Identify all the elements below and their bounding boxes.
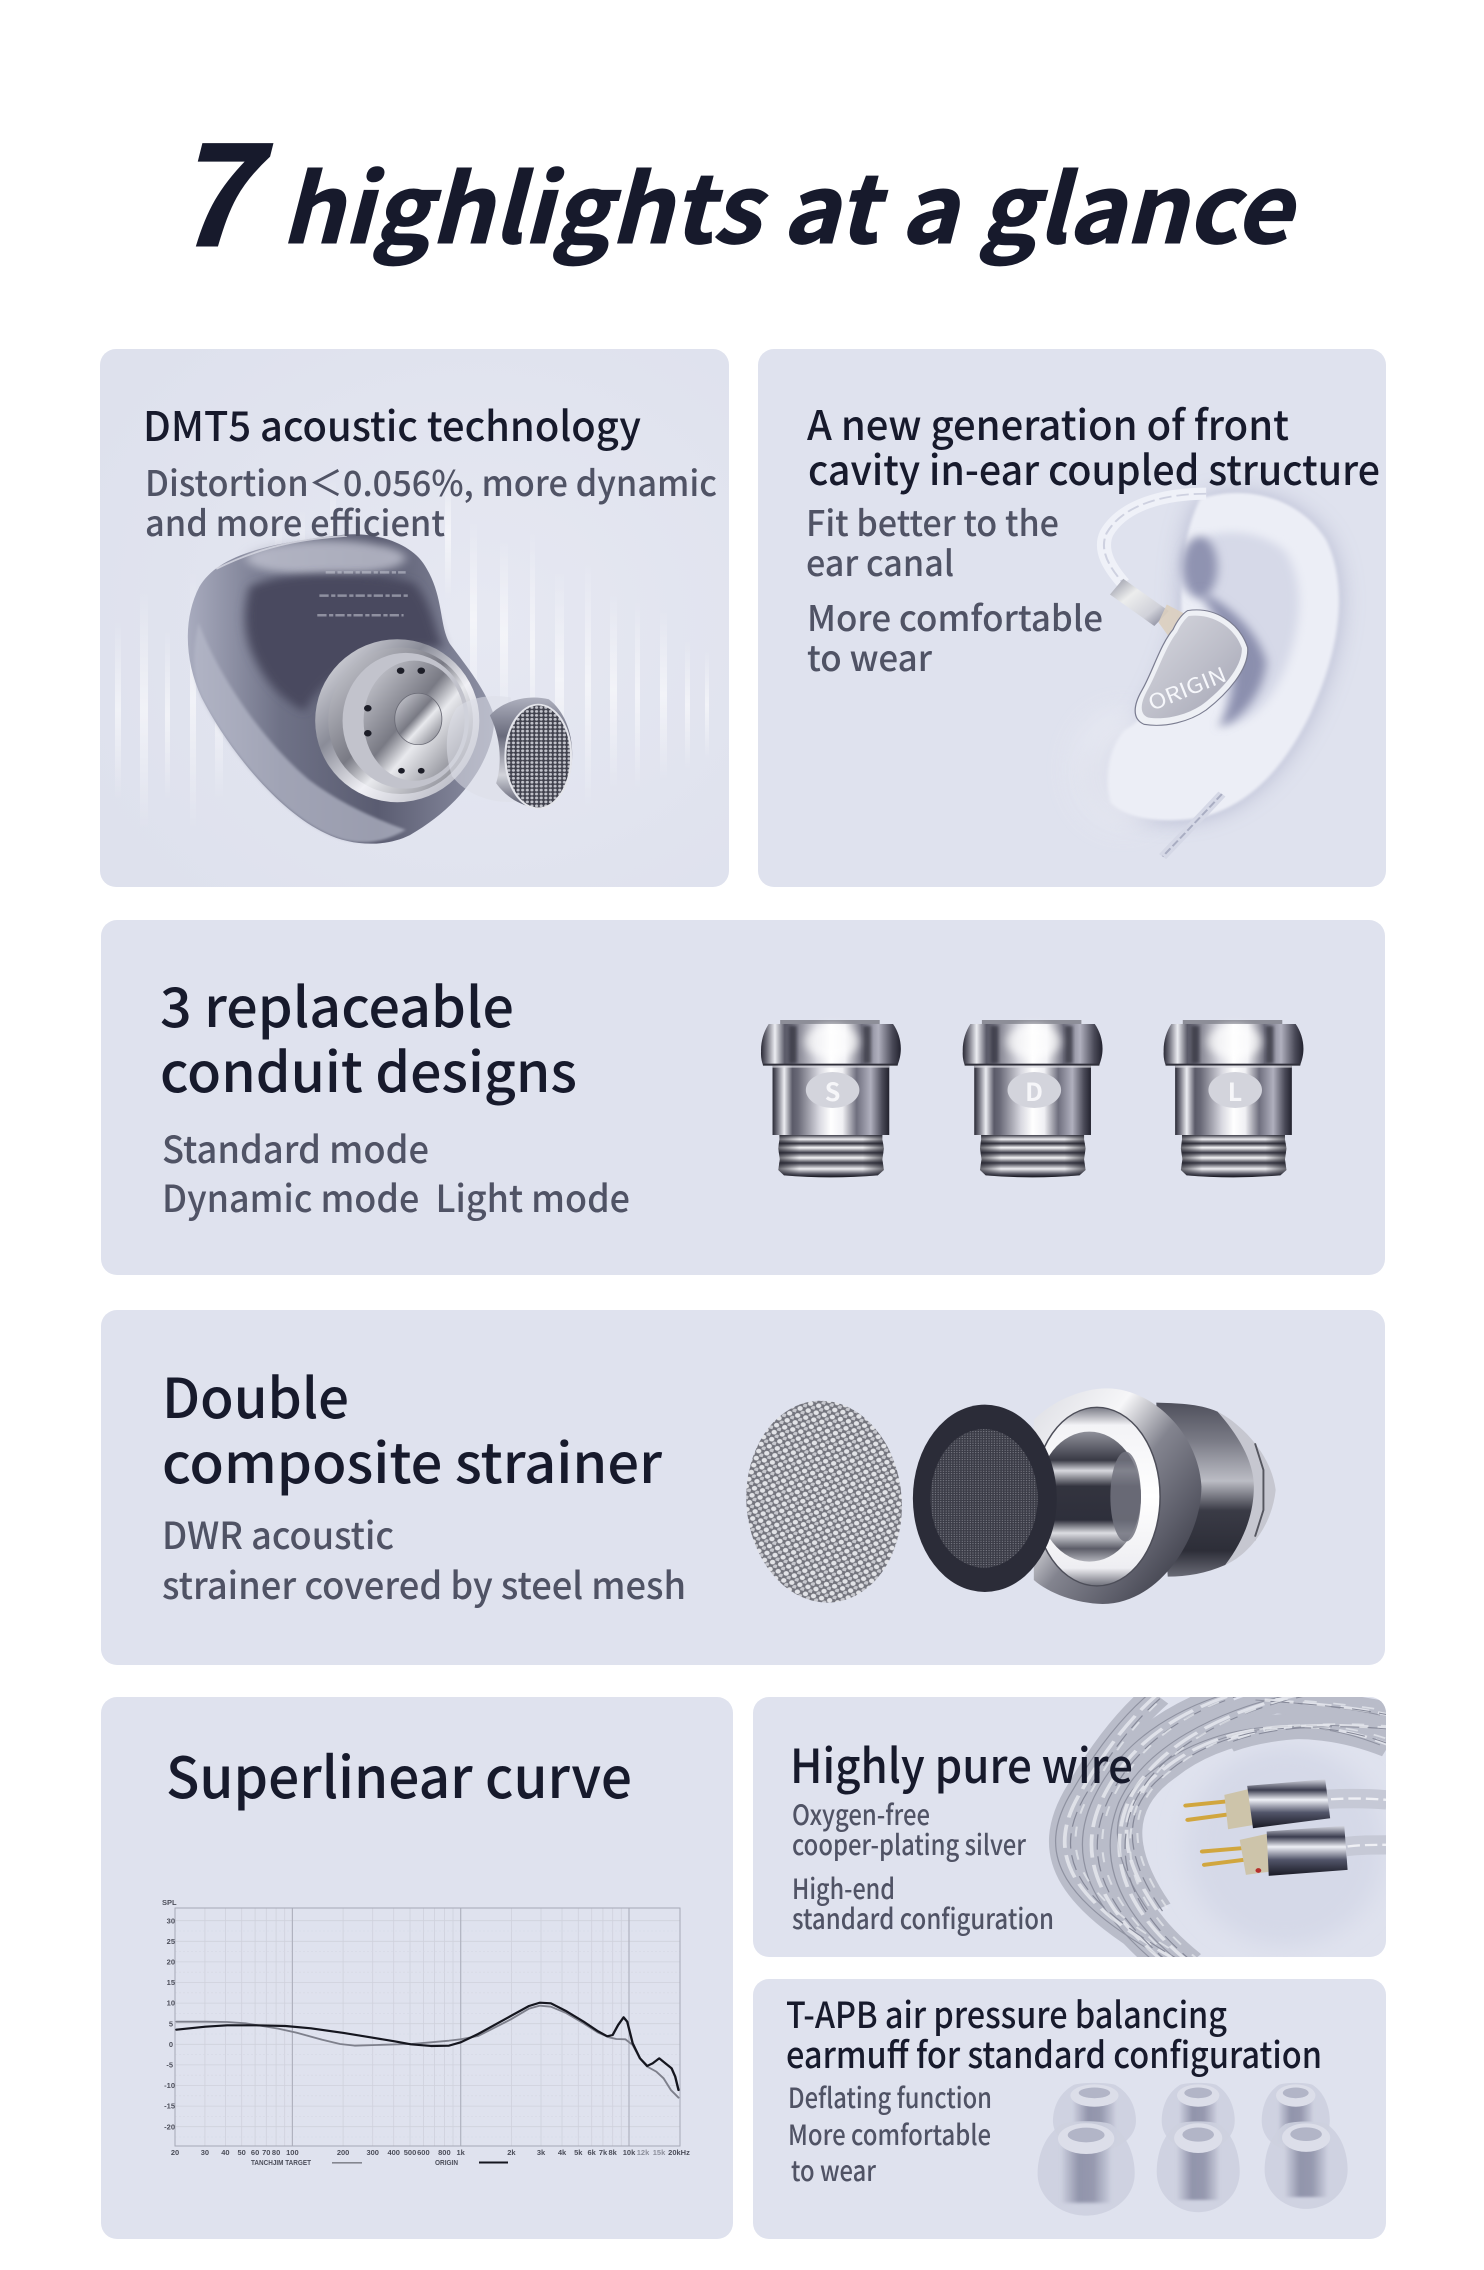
text block: Oxygen-free [792, 1794, 930, 1834]
heading [160, 963, 577, 1108]
line chart: frequency response: 5 [169, 2019, 173, 2028]
line chart: frequency response: 10k [623, 2148, 636, 2157]
text block [162, 1120, 630, 1223]
text block [792, 1794, 1054, 1938]
line chart: frequency response [162, 1898, 690, 2167]
heading: cavity in-ear coupled structure [808, 437, 1380, 497]
panel: double composite strainer [101, 1310, 1385, 1665]
icon: conduit D [963, 1020, 1103, 1177]
line chart: frequency response: 0 [169, 2040, 173, 2049]
line chart: frequency response: 20 [167, 1958, 175, 1966]
heading: conduit designs [160, 1028, 577, 1108]
line chart: frequency response: SPL [162, 1898, 177, 1907]
text block: Standard mode [162, 1120, 429, 1174]
text block: High-end [792, 1868, 895, 1908]
text block: standard configuration [792, 1898, 1054, 1938]
panel: DMT5 acoustic technology [100, 349, 729, 887]
text block: More comfortable [807, 591, 1103, 642]
text block [788, 2077, 992, 2190]
icon: conduit S: S [825, 1073, 840, 1109]
icon label: ORIGIN: ORIGIN [1143, 659, 1231, 717]
icon: conduit L: L [1228, 1073, 1242, 1109]
heading: composite strainer [162, 1419, 663, 1499]
line chart: frequency response: 40 [221, 2148, 230, 2157]
line chart: frequency response: 60 [251, 2148, 259, 2157]
heading: A new generation of front [807, 392, 1289, 452]
text block: Deflating function [788, 2077, 992, 2117]
line chart: frequency response: 20 [171, 2148, 179, 2157]
line chart: frequency response: 500 [404, 2148, 416, 2157]
panel: highly pure wire [753, 1694, 1400, 1964]
text block: Distortion＜0.056%, more dynamic [145, 456, 717, 507]
line chart: frequency response: 1k [457, 2148, 466, 2157]
line chart: frequency response: 100 [286, 2148, 299, 2157]
line chart: frequency response: 600 [417, 2148, 430, 2157]
line chart: frequency response: -5 [166, 2060, 173, 2070]
heading: 3 replaceable [160, 963, 514, 1043]
line chart: frequency response: TANCHJIM TARGET [251, 2158, 311, 2167]
line chart: frequency response: 5k [574, 2148, 583, 2157]
heading [807, 392, 1380, 497]
heading: Superlinear curve [166, 1733, 632, 1815]
icon: conduit D: D [1025, 1073, 1043, 1109]
text block: cooper-plating silver [792, 1824, 1026, 1864]
text block: ear canal [806, 536, 954, 587]
text block: More comfortable [788, 2114, 991, 2154]
text block: to wear [791, 2150, 876, 2190]
line chart: frequency response: 7k [599, 2148, 608, 2157]
line chart: frequency response: 50 [238, 2148, 246, 2157]
line chart: frequency response: 8k [609, 2148, 618, 2157]
text block: to wear [807, 631, 933, 682]
title: 7 [170, 81, 273, 287]
panel: front cavity structure [758, 349, 1386, 887]
icon: conduit S [761, 1020, 901, 1177]
line chart: frequency response: 400 [387, 2148, 400, 2157]
heading: DMT5 acoustic technology [143, 393, 641, 453]
line chart: frequency response: 2k [507, 2148, 516, 2157]
line chart: frequency response: -20 [164, 2122, 175, 2131]
line chart: frequency response: -15 [164, 2102, 175, 2111]
title: highlights at a glance [281, 135, 1299, 271]
text block: Dynamic mode Light mode [162, 1169, 630, 1223]
text block: and more efficient [145, 496, 445, 547]
panel: 3 replaceable conduit designs [101, 920, 1385, 1275]
line chart: frequency response: 800 [438, 2148, 451, 2157]
line chart: frequency response: 30 [201, 2148, 209, 2157]
heading: Highly pure wire [790, 1728, 1133, 1797]
icon: six silicone ear tips [1038, 2083, 1348, 2216]
line chart: frequency response: 10 [167, 1999, 175, 2008]
line chart: frequency response: 25 [167, 1937, 175, 1946]
line chart: frequency response: 6k [588, 2148, 597, 2157]
line chart: frequency response: 70 [262, 2148, 270, 2157]
icon: transparent earphone shell with driver and nozzle [188, 534, 572, 844]
title [170, 81, 1299, 287]
text block [806, 496, 1103, 682]
text block: DWR acoustic [162, 1506, 394, 1560]
line chart: frequency response: 300 [366, 2148, 379, 2157]
icon: conduit L [1164, 1020, 1303, 1177]
line chart: frequency response: 3k [537, 2148, 546, 2157]
panel: T-APB earmuff [753, 1979, 1386, 2239]
heading: earmuff for standard configuration [786, 2027, 1322, 2079]
text block [162, 1506, 686, 1610]
line chart: frequency response: 12k [637, 2148, 650, 2157]
heading: Double [162, 1354, 349, 1434]
text block [145, 456, 717, 547]
text block: Fit better to the [806, 496, 1059, 547]
panel: superlinear curve [101, 1697, 733, 2239]
line chart: frequency response: 80 [272, 2148, 280, 2157]
line chart: frequency response: 200 [337, 2148, 349, 2157]
icon: ear wearing earphone [1073, 493, 1339, 857]
line chart: frequency response: 15 [167, 1978, 175, 1987]
line chart: frequency response: -10 [164, 2081, 175, 2090]
text block: strainer covered by steel mesh [162, 1556, 686, 1610]
line chart: frequency response: 15k [653, 2148, 666, 2157]
heading: T-APB air pressure balancing [786, 1987, 1227, 2039]
line chart: frequency response: 30 [167, 1916, 175, 1926]
heading [786, 1987, 1322, 2079]
icon: exploded strainer assembly [740, 1388, 1276, 1606]
line chart: frequency response: 4k [558, 2148, 567, 2157]
heading [162, 1354, 663, 1499]
line chart: frequency response: ORIGIN [435, 2158, 458, 2167]
line chart: frequency response: 20kHz [668, 2148, 690, 2157]
icon: silver cable and 2-pin connectors [1056, 1694, 1400, 1964]
